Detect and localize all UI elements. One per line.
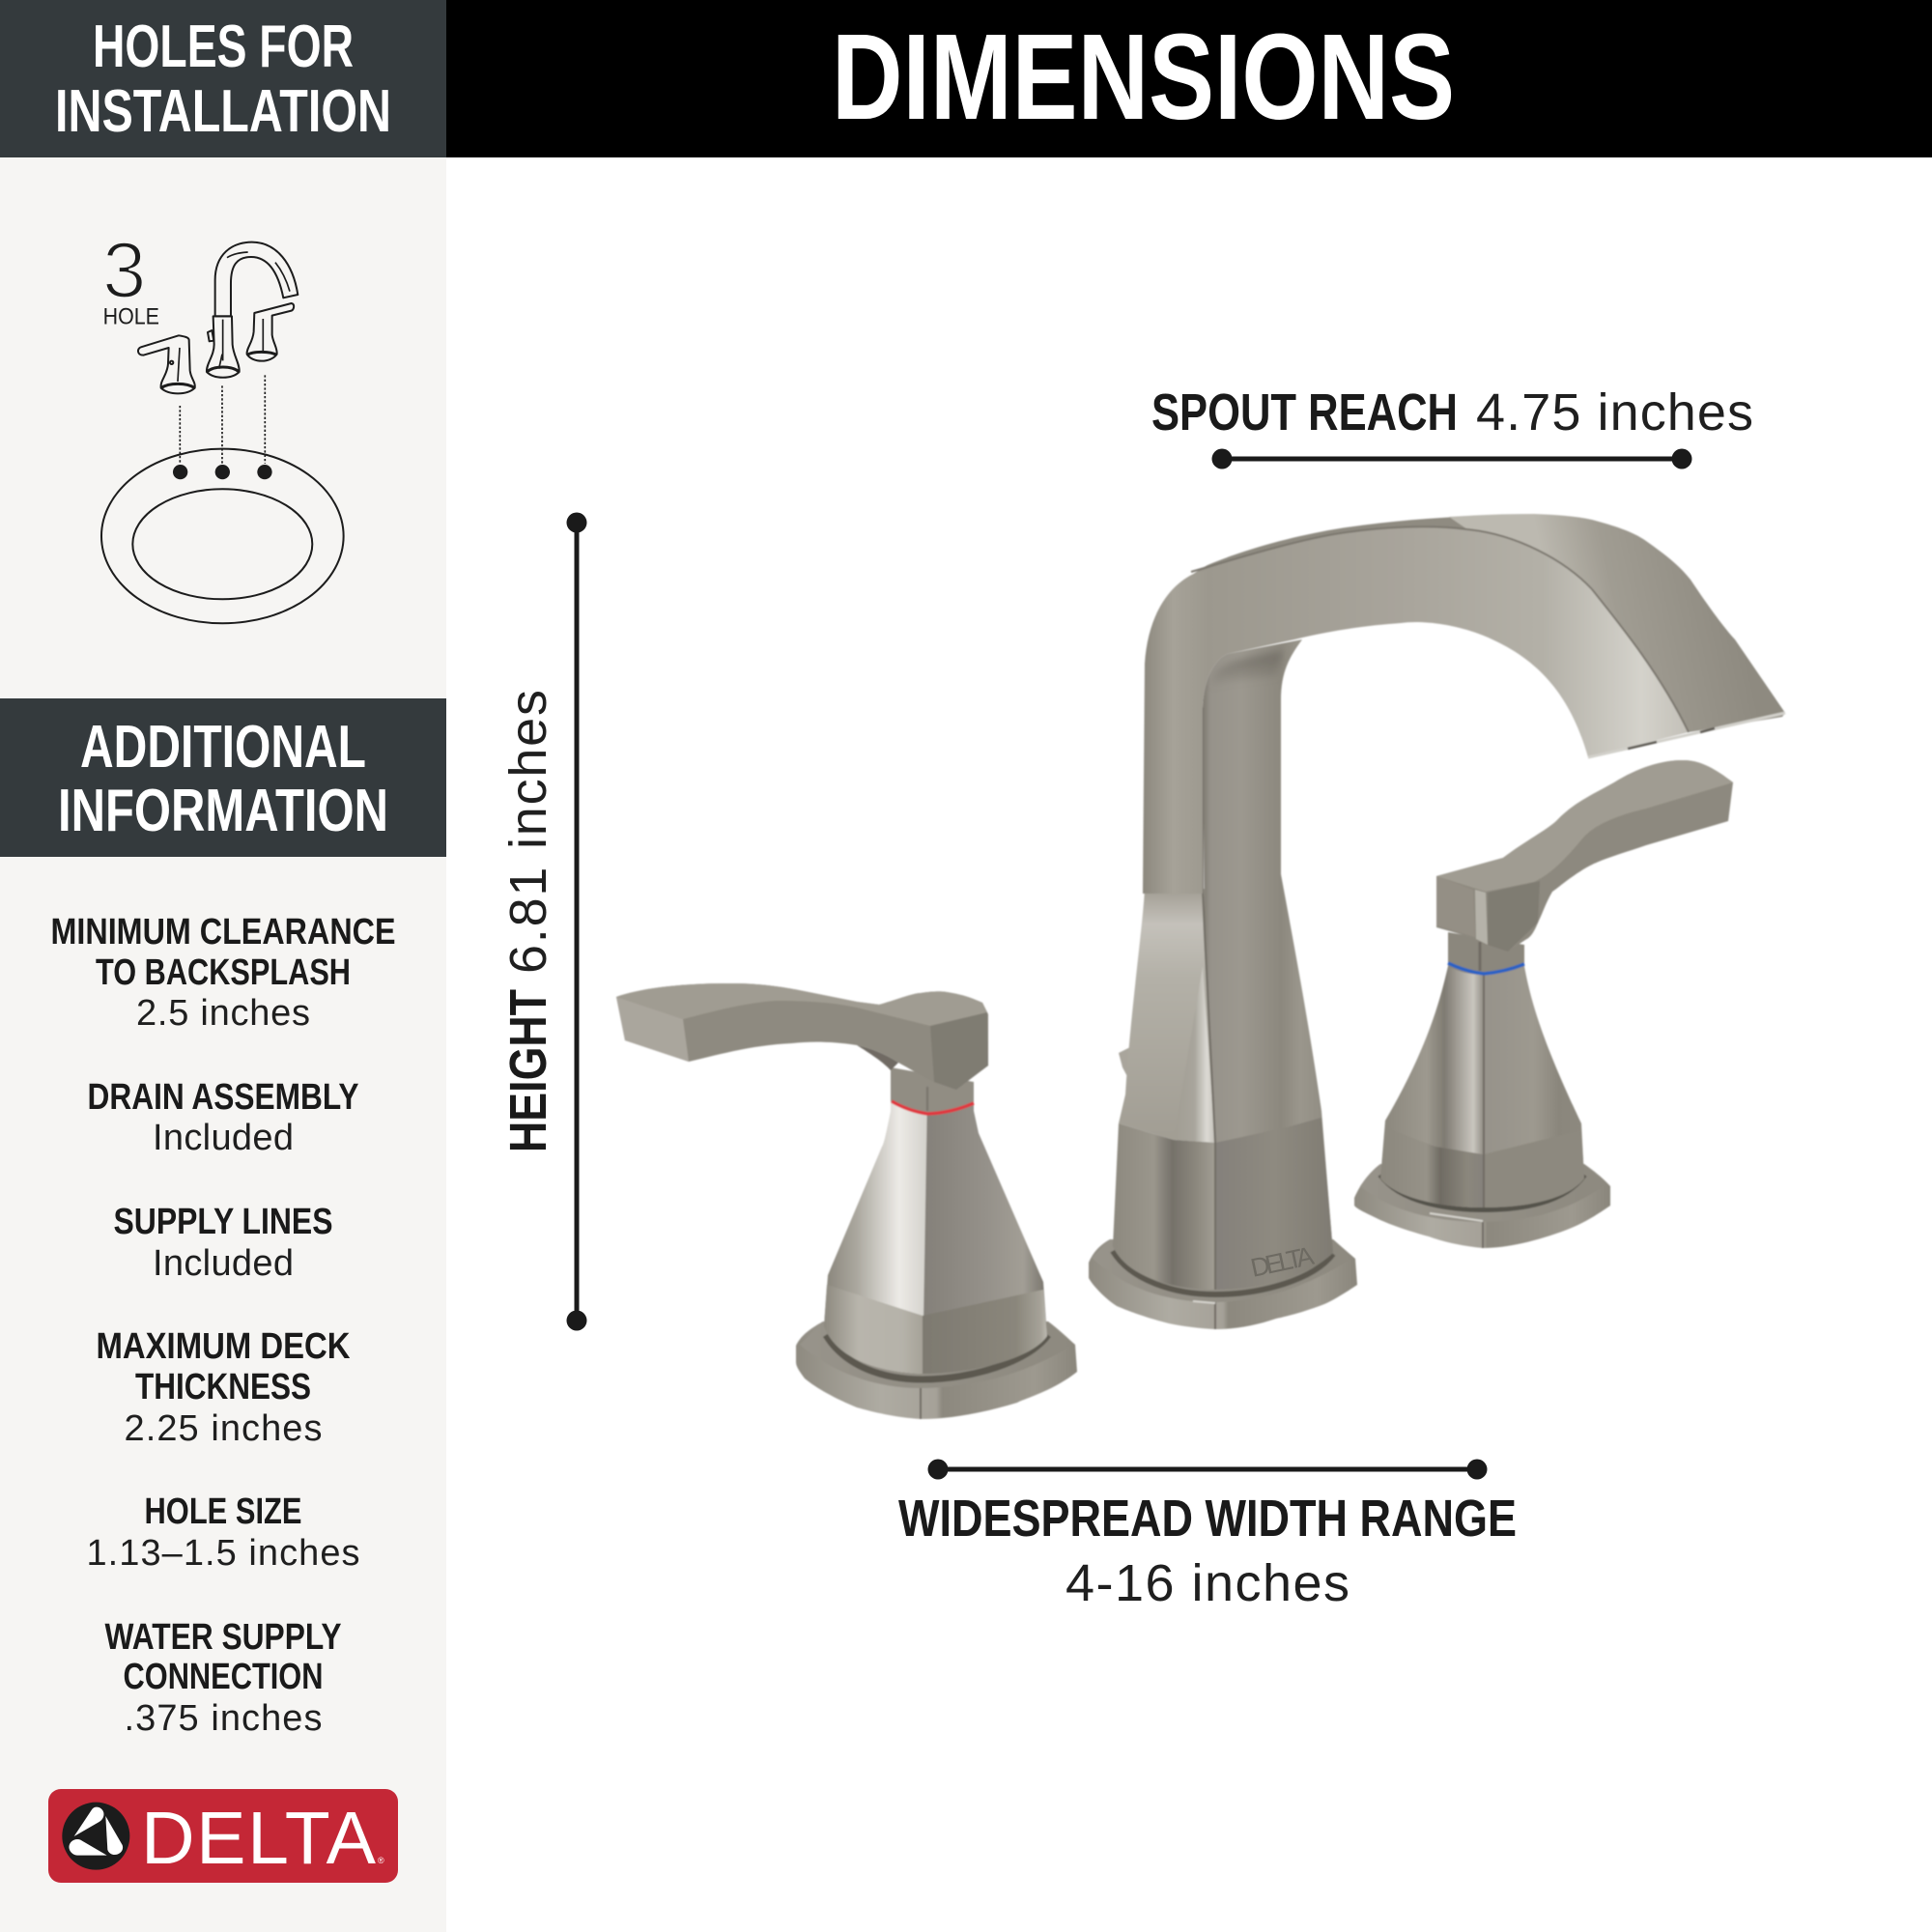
heading banner: additional information: INFORMATION (58, 778, 388, 844)
left handle cone (824, 1067, 1047, 1374)
spec: minimum clearance: TO BACKSPLASH (96, 952, 351, 993)
left handle lever (616, 983, 988, 1090)
spec: hole size (87, 1492, 359, 1574)
spec: minimum clearance: 2.5 inches (136, 993, 310, 1034)
right handle lever (1436, 760, 1733, 952)
logo mark (62, 1803, 129, 1870)
left handle base (796, 1321, 1077, 1419)
dimension: widespread width range (898, 1459, 1517, 1612)
spec: hole size: 1.13–1.5 inches (87, 1533, 359, 1574)
dimension: widespread width range: 4-16 inches (1065, 1554, 1350, 1612)
spec: minimum clearance: MINIMUM CLEARANCE (50, 912, 396, 952)
heading banner: holes for installation (0, 0, 446, 157)
center base plate (1089, 1239, 1357, 1329)
cold indicator ring (1448, 963, 1524, 974)
spec: maximum deck thickness: MAXIMUM DECK (97, 1326, 351, 1367)
right handle cone (1380, 932, 1584, 1208)
spout edge lines and outlet rim (1191, 526, 1785, 757)
center faucet body (1113, 889, 1215, 1290)
label: 3 hole (102, 226, 159, 330)
label: 3 hole: 3 (102, 226, 146, 314)
embossed delta wordmark on faucet: DELTA (1248, 1241, 1317, 1283)
label: 3 hole: HOLE (103, 304, 159, 330)
dimension: height: HEIGHT (499, 989, 557, 1152)
dimension: spout reach: 4.75 inches (1476, 384, 1753, 441)
spout side face (1449, 514, 1785, 732)
panel: left sidebar background (0, 0, 446, 1932)
heading banner: holes for installation: HOLES FOR (93, 14, 354, 80)
spout rim (1169, 516, 1488, 604)
spec: supply lines: SUPPLY LINES (114, 1202, 332, 1242)
heading banner: additional information: ADDITIONAL (80, 714, 366, 781)
dotted guide lines (180, 375, 265, 464)
mounting holes (173, 465, 272, 479)
spec: hole size: HOLE SIZE (145, 1492, 301, 1532)
spec: maximum deck thickness: THICKNESS (135, 1367, 311, 1407)
small faucet right handle (247, 303, 294, 361)
heading banner: additional information (0, 698, 446, 857)
spec: drain assembly: DRAIN ASSEMBLY (87, 1077, 359, 1118)
title banner: dimensions (446, 0, 1932, 157)
spec: water supply connection: WATER SUPPLY (104, 1617, 342, 1658)
logo: delta: DELTA (141, 1797, 377, 1880)
spout front face (1143, 526, 1689, 894)
hot indicator ring (892, 1101, 974, 1114)
heading banner: holes for installation: INSTALLATION (55, 78, 391, 145)
dimension: spout reach: SPOUT REACH (1151, 384, 1458, 441)
dimension: height: 6.81 inches (499, 690, 557, 974)
spec: water supply connection (104, 1617, 342, 1739)
faucet photo illustration (616, 514, 1785, 1419)
dimension: height (499, 512, 587, 1331)
right handle base (1354, 1164, 1610, 1248)
center column inner face and flare (1203, 639, 1333, 1290)
spec: supply lines: Included (153, 1243, 294, 1284)
spec: drain assembly (87, 1077, 359, 1158)
spec: drain assembly: Included (153, 1118, 294, 1158)
pop-up drain knob (1119, 1046, 1132, 1082)
spec: maximum deck thickness (97, 1326, 351, 1449)
spec: minimum clearance (50, 912, 396, 1034)
dimension: spout reach (1151, 384, 1753, 469)
title banner: dimensions: DIMENSIONS (832, 9, 1455, 145)
spec: supply lines (114, 1202, 332, 1284)
spec: water supply connection: CONNECTION (124, 1657, 323, 1697)
logo: delta (48, 1789, 398, 1883)
spec: water supply connection: .375 inches (124, 1698, 323, 1739)
sink basin (101, 449, 344, 623)
icon: three hole sink diagram (101, 226, 344, 623)
logo: delta: ® (378, 1856, 384, 1865)
dimension: widespread width range: WIDESPREAD WIDTH RANGE (898, 1490, 1517, 1548)
small faucet spout (207, 242, 298, 378)
small faucet left handle (138, 335, 195, 393)
spec: maximum deck thickness: 2.25 inches (124, 1408, 323, 1449)
